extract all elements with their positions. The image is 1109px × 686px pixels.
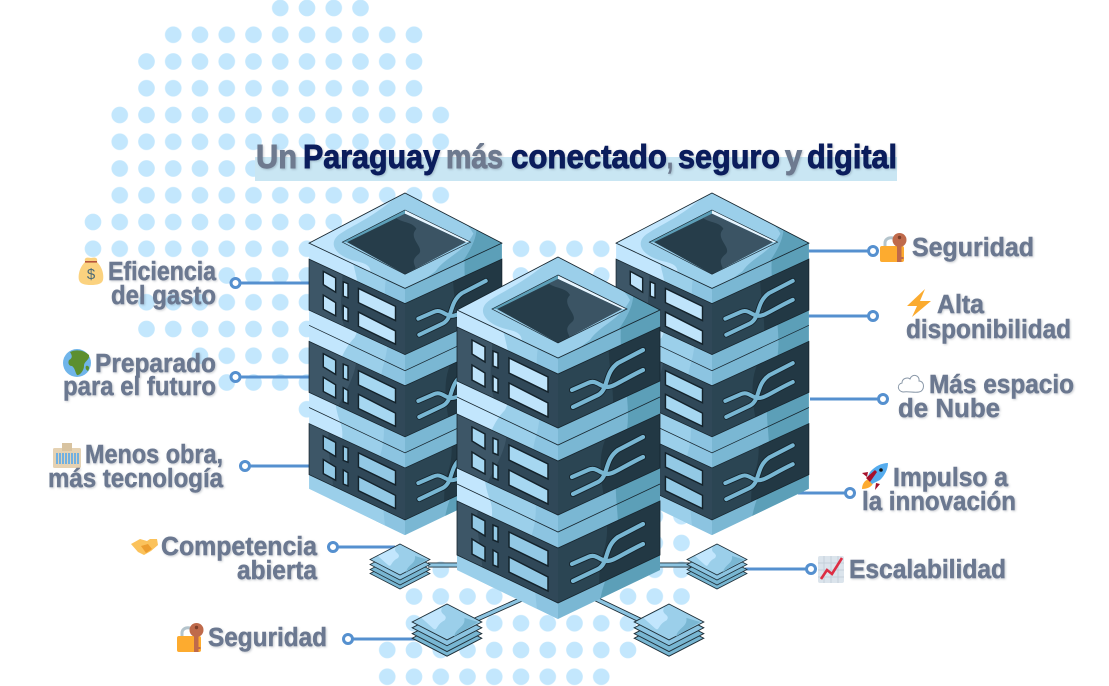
label: Más espacio de Nube: de Nube	[898, 395, 1000, 423]
label: Preparado para el futuro: para el futuro	[63, 373, 216, 401]
label: Menos obra, más tecnología: más tecnología	[48, 465, 224, 493]
label: Impulso a la innovación: la innovación	[862, 488, 1016, 516]
label: Seguridad (lower left): Seguridad	[208, 624, 327, 652]
label: Competencia abierta: abierta	[237, 557, 318, 585]
title: más	[446, 138, 503, 175]
dotted background pattern	[80, 0, 695, 686]
label: Eficiencia del gasto: Eficiencia	[108, 258, 217, 286]
label: Preparado para el futuro: Preparado	[95, 350, 216, 378]
title: conectado	[511, 138, 667, 175]
label: Impulso a la innovación	[862, 463, 1016, 516]
platform: upper right	[687, 544, 747, 589]
connector lines and nodes	[231, 246, 888, 644]
platform: upper left	[370, 544, 430, 589]
label: Seguridad (upper right): Seguridad	[912, 234, 1034, 262]
label: Competencia abierta: Competencia	[161, 533, 318, 561]
title: Paraguay	[303, 138, 441, 175]
label: Eficiencia del gasto: del gasto	[111, 282, 216, 310]
label: Eficiencia del gasto	[79, 258, 217, 310]
server tower: right	[609, 186, 818, 555]
icon: lightning bolt	[907, 289, 931, 317]
server tower: center	[450, 250, 670, 640]
platform: lower left	[412, 604, 482, 656]
label: Menos obra, más tecnología: Menos obra,	[85, 441, 223, 469]
server tower: left	[302, 186, 511, 555]
icon: money bag: $	[87, 266, 96, 283]
icon: rising chart	[818, 556, 844, 583]
icon: lock and key	[177, 623, 204, 652]
label: Alta disponibilidad	[906, 289, 1071, 344]
label: Más espacio de Nube	[898, 371, 1074, 423]
icon: globe	[63, 349, 91, 377]
title: Un	[256, 138, 297, 175]
icon: building	[53, 443, 81, 468]
label: Más espacio de Nube: Más espacio	[929, 371, 1074, 399]
label: Competencia abierta	[131, 533, 318, 585]
label: Alta disponibilidad: disponibilidad	[906, 316, 1071, 344]
title: seguro	[678, 138, 780, 175]
icon: lock and key	[880, 233, 906, 262]
label: Escalabilidad: Escalabilidad	[849, 556, 1006, 584]
title highlight band	[255, 157, 897, 181]
label: Impulso a la innovación: Impulso a	[893, 464, 1009, 492]
platform: lower right	[634, 604, 704, 656]
title: ,	[667, 138, 673, 175]
icon: handshake	[131, 539, 158, 555]
title: digital	[807, 138, 897, 175]
icon: rocket	[862, 463, 888, 490]
label: Menos obra, más tecnología	[48, 441, 224, 493]
icon: cloud	[898, 375, 924, 392]
network cables between platforms and server	[428, 565, 692, 622]
label: Preparado para el futuro	[63, 349, 216, 401]
title: y	[785, 138, 803, 175]
title	[256, 138, 897, 175]
label: Alta disponibilidad: Alta	[937, 291, 985, 319]
